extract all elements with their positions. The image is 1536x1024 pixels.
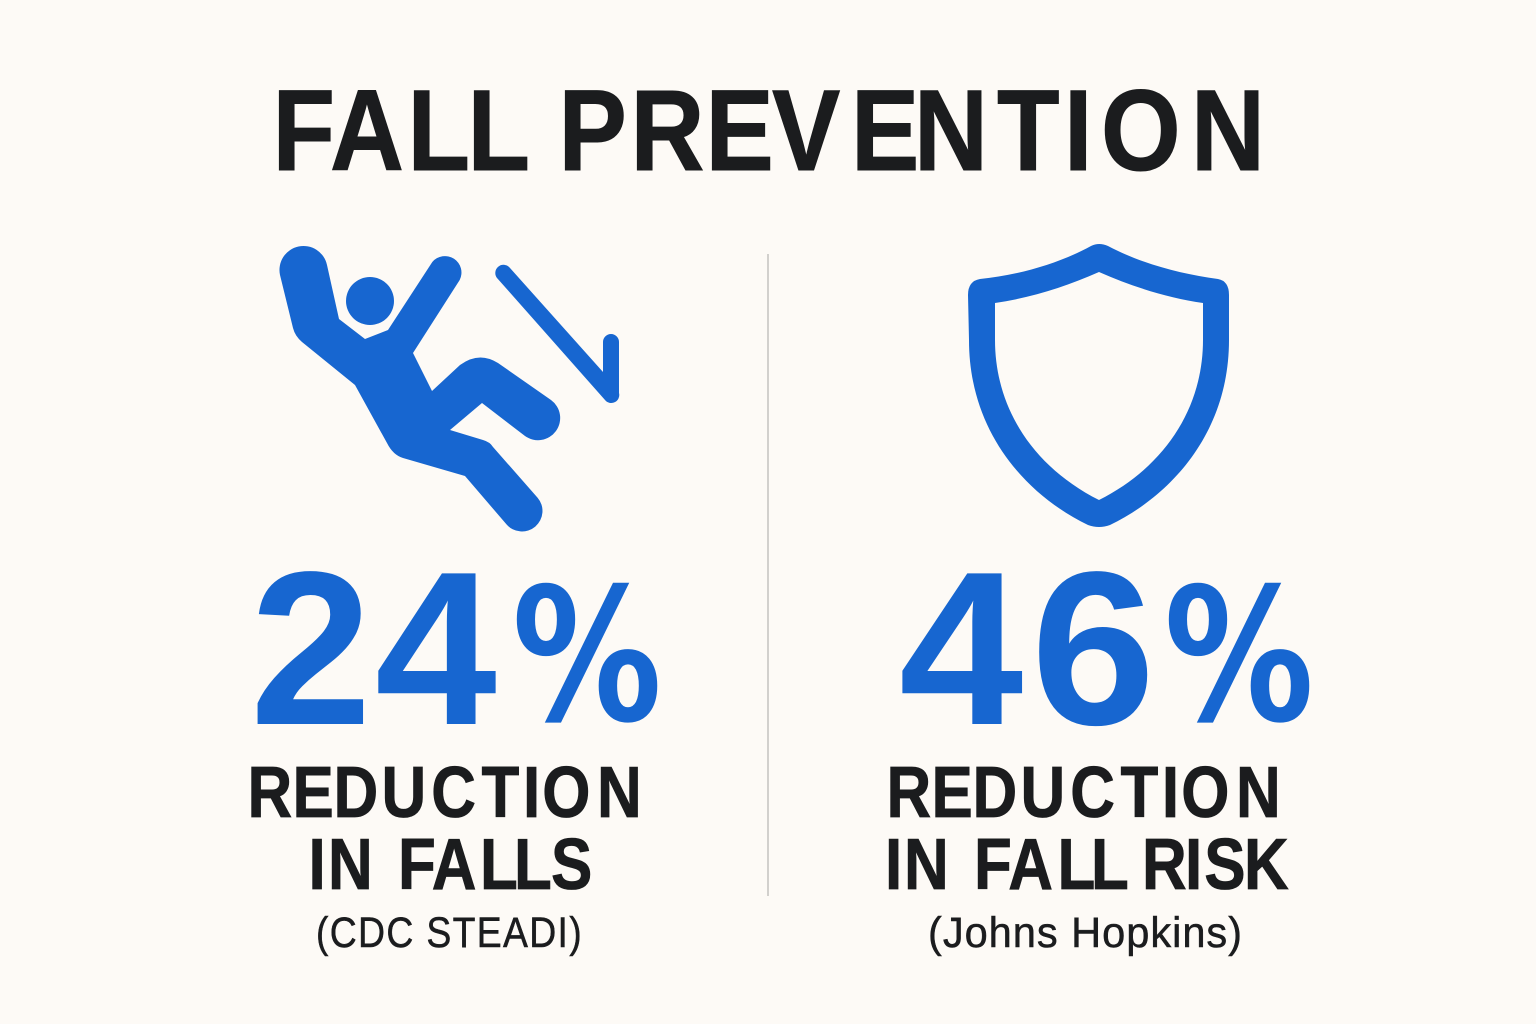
statistic: 46%: 46 bbox=[899, 526, 1155, 771]
statistic: 46% bbox=[899, 526, 1314, 771]
label: reduction in fall risk: REDUCTION bbox=[886, 753, 1281, 833]
icon: head bbox=[346, 277, 394, 325]
statistic: 24%: % bbox=[512, 548, 662, 764]
statistic: 46%: % bbox=[1164, 548, 1314, 764]
label: reduction in fall risk: IN FALL RISK bbox=[885, 825, 1289, 905]
label: reduction in falls: IN FALLS bbox=[308, 825, 592, 905]
statistic: 24% bbox=[250, 527, 662, 771]
panel: Johns Hopkins fall risk statistic bbox=[885, 244, 1314, 957]
statistic: 24%: 24 bbox=[250, 527, 497, 771]
icon: motion line bbox=[495, 265, 619, 403]
label: reduction in falls: REDUCTION bbox=[248, 753, 642, 833]
icon: person falling bbox=[279, 246, 619, 531]
label: reduction in fall risk bbox=[885, 753, 1289, 905]
icon: shield bbox=[968, 244, 1229, 527]
label: reduction in falls bbox=[248, 753, 642, 905]
title: FALL PREVENTION bbox=[273, 66, 1265, 195]
divider between panels bbox=[767, 254, 769, 896]
panel: CDC STEADI falls statistic bbox=[248, 246, 662, 957]
source: CDC STEADI: (CDC STEADI) bbox=[316, 909, 583, 957]
source: Johns Hopkins: (Johns Hopkins) bbox=[928, 909, 1243, 957]
